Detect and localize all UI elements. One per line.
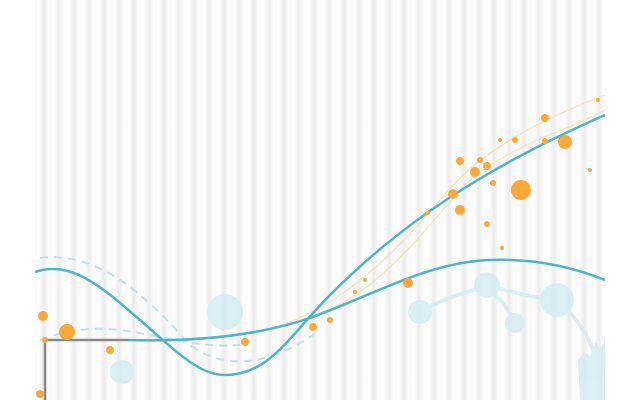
orange dots	[36, 98, 600, 398]
blue curve B	[128, 260, 605, 340]
pale blue circles and connectors	[110, 272, 605, 400]
faint yellow curves	[250, 95, 605, 335]
blue curve A	[35, 115, 605, 375]
faint dashed curves	[40, 257, 320, 361]
gray axis	[45, 340, 128, 400]
